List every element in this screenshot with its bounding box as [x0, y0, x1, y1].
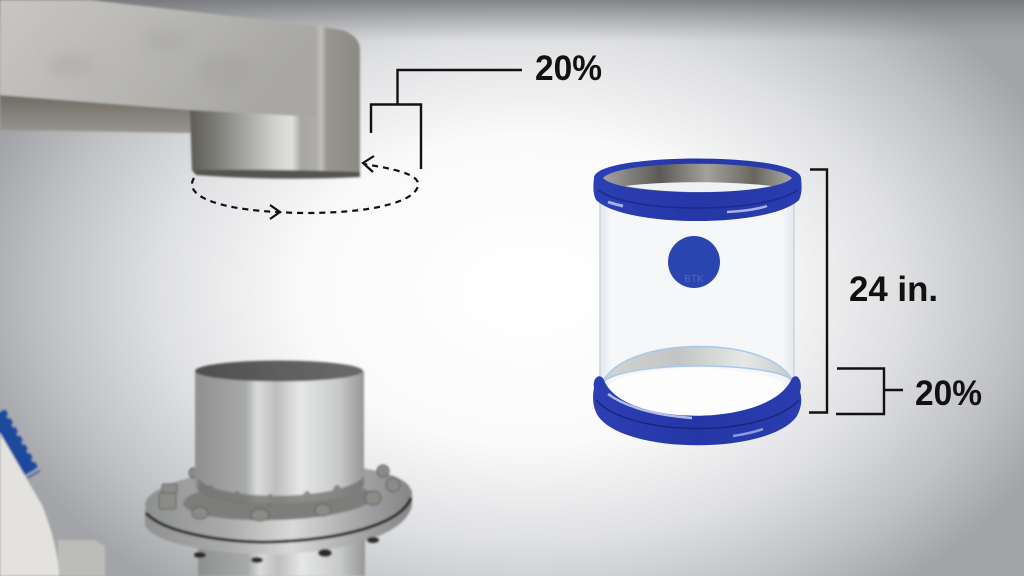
20% bracket for sleeve cuff [836, 368, 903, 414]
lower pipe section [198, 535, 365, 576]
pipe opening [195, 360, 363, 382]
flange rim [145, 490, 412, 554]
20% label bottom: 20% [915, 374, 982, 413]
arm underside strip [0, 95, 192, 133]
top blue cuff [593, 158, 802, 221]
top inner metal opening [603, 164, 792, 192]
flange black seal [146, 498, 411, 542]
arm surface blotches [46, 28, 253, 90]
20% label top: 20% [535, 49, 602, 88]
blue textured hose [0, 414, 32, 476]
20% bracket for arm outlet [371, 70, 522, 169]
arrowhead upper [363, 156, 374, 172]
flange raised ring [182, 477, 374, 523]
lower inner metal ring [603, 346, 792, 382]
white hopper bottom left [0, 414, 105, 576]
dashed rotation path with arrows [192, 156, 418, 219]
overhead metal arm with outlet [0, 0, 360, 179]
arrowhead lower [270, 205, 280, 219]
arm side face [300, 26, 360, 176]
pipe base shadow and weld bolts [198, 476, 364, 506]
bottom blue cuff [593, 376, 801, 445]
outlet lower lip [192, 170, 360, 179]
sleeve glass body [600, 200, 794, 415]
blue disc logo [668, 236, 720, 288]
pipe body [195, 371, 364, 504]
sleeve floor opening [605, 368, 789, 416]
24 in. label: 24 in. [849, 270, 938, 309]
white hopper body [0, 433, 59, 576]
flange bolts [159, 465, 400, 521]
lower pipe with bolted flange [143, 360, 413, 576]
flange lower bolts [194, 537, 379, 563]
flange top surface [143, 458, 413, 538]
arm front face [0, 0, 318, 116]
outlet stub [190, 110, 301, 172]
24 in. bracket [809, 170, 827, 412]
clear sleeve with blue cuffs [593, 158, 802, 445]
grey support block [58, 540, 105, 576]
blue disc logo: BTK [684, 274, 704, 285]
